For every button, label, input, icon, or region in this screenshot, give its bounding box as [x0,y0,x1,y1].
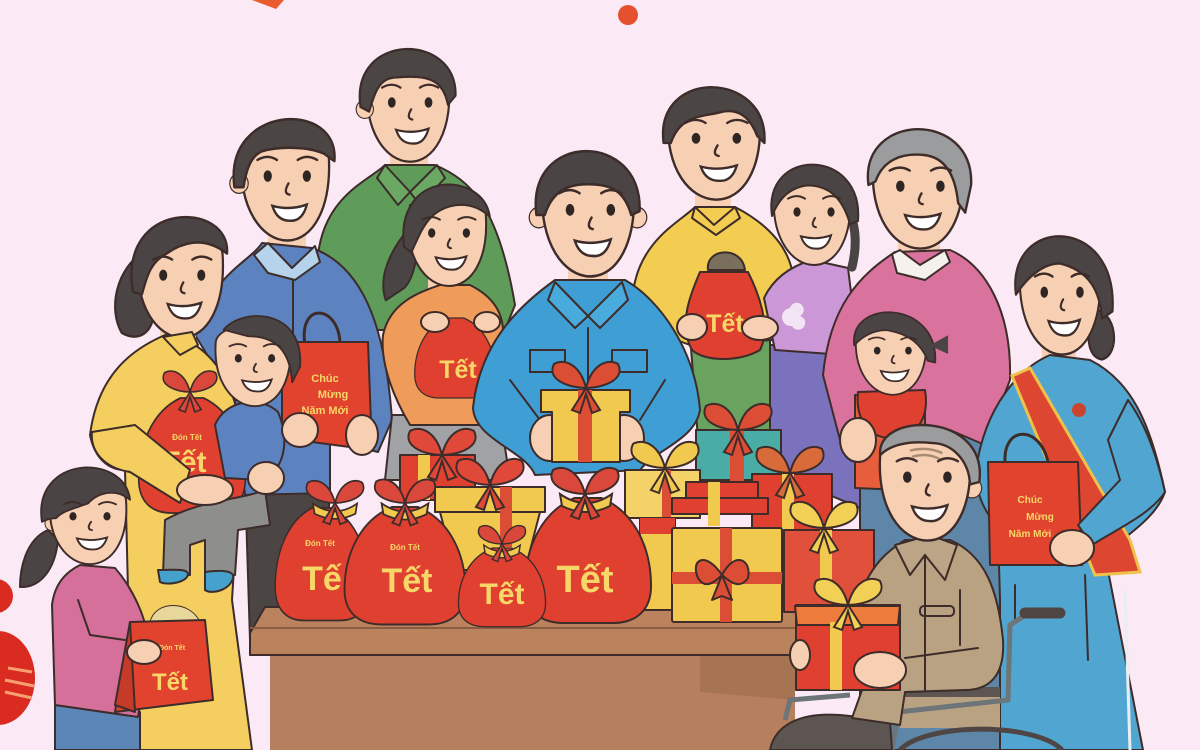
decoration: left red flower [0,579,35,725]
decoration: top orange shard [252,0,284,9]
table [250,607,800,750]
person: woman in blue ao dai [976,236,1165,750]
bag: little girl's red bag: Tết [152,669,188,696]
person: man in green shirt [318,49,515,330]
bag: Tết bag B: Đón Tết [390,543,420,552]
person: girl in orange sweater: Tết [439,356,477,384]
bag: Tết bag D: Tết [556,559,614,601]
bag: Tết bag A [275,481,369,620]
person: old man in wheelchair [770,425,1062,750]
bag: red shopping bag with greeting: Mừng [318,389,348,401]
bag: Tết bag B [345,479,465,624]
person: girl in lilac sweater [742,165,865,510]
person: woman in yellow ao dai [90,217,252,750]
person: grandmother in pink [823,129,1010,750]
bag: woman's red bag: Đón Tết [172,433,202,442]
decoration: top red dot [618,5,638,25]
bag: Tết bag A: Tế [302,560,342,598]
gift stack behind bags [400,429,545,570]
bag: red shopping bag with greeting: Năm Mới [302,405,348,417]
person: woman in blue ao dai: Chúc [1018,495,1043,506]
bag: small Tết bag C: Tết [480,578,525,611]
bag: Tết bag D [525,468,651,623]
bag: Tết bag B: Tết [382,562,432,600]
bag: small Tết bag C [458,526,546,627]
person: central man in blue shirt [473,151,700,475]
bag: red shopping bag with greeting [282,313,372,450]
person: toddler held by grandmother [840,312,948,490]
person: woman in blue ao dai: Năm Mới [1009,529,1052,540]
gift: large yellow box with bow [672,528,782,622]
bag: little girl's red bag: Đón Tết [159,644,186,652]
person: little girl in pink [20,467,148,750]
person: man in blue shirt [195,119,392,640]
bag: woman's red bag: Tết [162,446,207,479]
gift stack right of bags [625,404,874,612]
person: baby held by woman [158,316,378,592]
person: boy in yellow sweater: Tết [706,310,744,338]
bag: little girl's red bag [115,606,213,712]
person: boy in yellow sweater [633,87,792,465]
person: woman in blue ao dai: Mừng [1026,512,1054,523]
bag: red shopping bag with greeting: Chúc [311,373,339,385]
gift: box held by central man [530,362,644,462]
bag: Tết bag A: Đón Tết [305,539,335,548]
bag: woman's red bag [92,371,245,513]
person: girl in orange sweater [383,185,510,480]
